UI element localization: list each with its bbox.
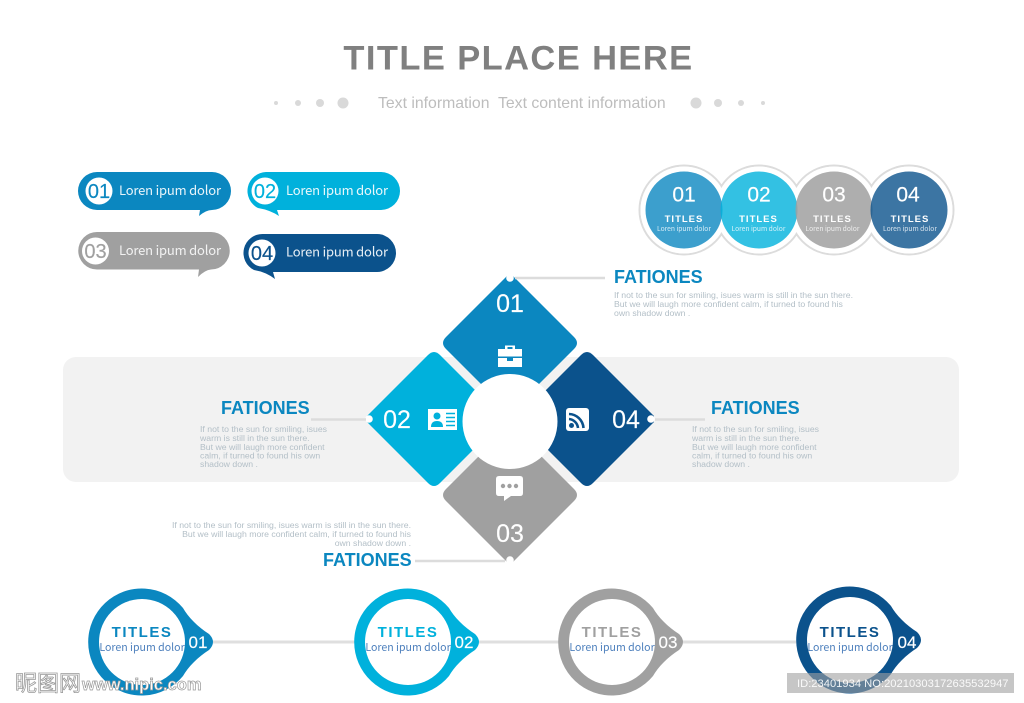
callout 02: If not to the sun for smiling, isues [200,424,328,434]
circle 02: 02 [747,184,771,206]
callout 04: But we will laugh more confident [692,442,817,452]
ring marker 01 [88,588,213,696]
ring marker 03: Loren ipum dolor [569,640,656,655]
callout 01 [515,267,853,318]
ring marker 03: TITLES [582,624,642,641]
diamond 04 [520,352,655,486]
ring marker 02: 02 [455,633,473,652]
pill 02 [247,172,400,216]
callout 03: own shadow down . [335,538,411,548]
circle 01: TITLES [665,214,703,225]
callout 02: warm is still in the sun there. [199,433,310,443]
circle 03: Loren ipum dolor [806,223,860,233]
ring marker 04: TITLES [820,624,880,641]
diamond 02 [365,352,501,486]
ring marker 02: Loren ipum dolor [365,640,452,655]
pill 01: 01 [88,181,110,203]
circle 04: Loren ipum dolor [883,223,937,233]
callout 02: calm, if turned to found his own [200,450,320,460]
icon: chat bubble [496,476,523,501]
callout 04 [655,398,820,469]
icon: rss [566,408,589,431]
callout 02: But we will laugh more confident [200,442,325,452]
pill 02: 02 [254,181,276,203]
grey background band [63,357,959,482]
pill 03: 03 [84,241,107,263]
circle 02: Loren ipum dolor [732,223,786,233]
circle 04 [870,172,948,248]
title: TITLE PLACE HERE [343,40,694,78]
circle 02 [720,172,798,248]
pill 04: 04 [251,243,273,265]
diamond 01: 01 [496,290,524,318]
icon: id card [428,409,457,430]
ring marker 04 [796,586,921,694]
callout 03 [172,520,505,570]
pill 01: Loren ipum dolor [119,180,222,199]
callout 01: If not to the sun for smiling, isues warm is still in the sun there. [614,290,853,300]
callout 04: shadow down . [692,459,750,469]
subtitle: Text information Text content information [378,95,666,112]
diamond 04: 04 [612,406,640,434]
ring marker 04: Loren ipum dolor [807,640,894,655]
callout 02: FATIONES [221,398,310,418]
pill 02: Loren ipum dolor [286,180,389,199]
centre white circle [462,374,558,469]
circle 03: 03 [822,184,846,206]
callout 01: But we will laugh more confident calm, if turned to found his [614,299,844,309]
callout 03: But we will laugh more confident calm, if turned to found his [182,529,412,539]
pill 04 [243,234,396,279]
pill 03 [78,232,230,277]
circle 01: Loren ipum dolor [657,223,711,233]
callout 02 [199,398,366,469]
diamond cluster [365,274,655,564]
ring marker 02 [354,588,479,696]
circle 03 [796,172,872,248]
circle 02: TITLES [739,214,778,225]
pill 04: Loren ipum dolor [286,242,389,260]
ring marker 03 [558,588,683,696]
callout 02: shadow down . [200,459,258,469]
icon: briefcase [498,346,522,367]
ring marker 02: TITLES [378,624,438,641]
circle 03: TITLES [813,214,852,225]
circle 01: 01 [672,184,696,206]
subtitle [274,95,765,112]
overlapping numbered circles [640,166,954,254]
callout 04: calm, if turned to found his own [692,450,812,460]
watermark: id strip [787,673,1014,693]
pill 01 [78,172,231,216]
callout 03: If not to the sun for smiling, isues warm is still in the sun there. [172,520,411,530]
ring marker 01: TITLES [112,624,172,641]
watermark: nipic [15,666,202,698]
callout 01: FATIONES [614,267,703,287]
diamond 02: 02 [383,406,411,434]
ring marker 01: 01 [189,633,207,652]
diamond 03: 03 [496,520,524,548]
circle 01 [646,172,722,248]
diamond 03 [443,428,577,564]
diamond 01 [443,274,577,410]
watermark: nipic: 昵图网 [15,666,81,698]
pill 03: Loren ipum dolor [119,240,222,259]
watermark: nipic: www.nipic.com [81,676,202,694]
speech pill labels [78,172,400,279]
watermark: id strip: ID:23401934 NO:20210303172635532947 [797,678,1009,690]
callout 04: FATIONES [711,398,800,418]
connector lines [213,640,798,644]
callout 01: own shadow down . [614,308,690,318]
circle 04: TITLES [891,214,929,225]
ring marker 01: Loren ipum dolor [99,640,186,655]
ring marker 03: 03 [659,633,677,652]
callout 03: FATIONES [323,550,412,570]
callout 04: warm is still in the sun there. [691,433,802,443]
callout 04: If not to the sun for smiling, isues [692,424,820,434]
circle 04: 04 [896,184,920,206]
ring marker 04: 04 [898,633,916,652]
